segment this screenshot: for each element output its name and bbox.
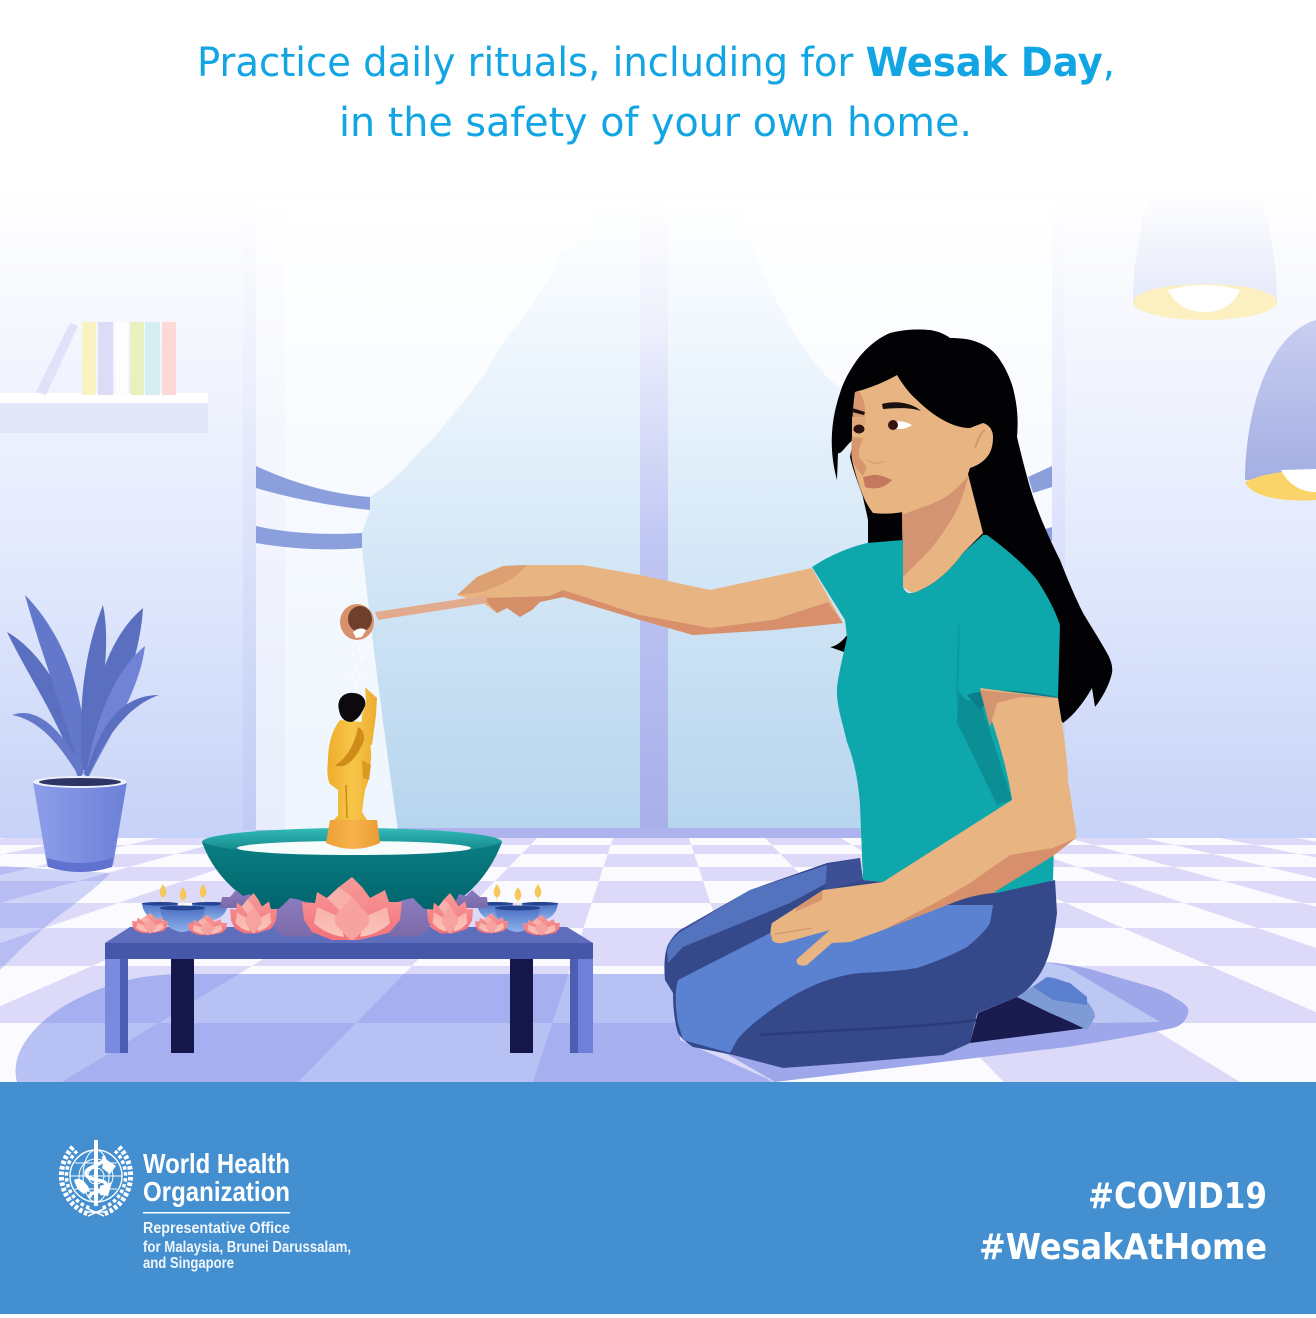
right curtain [735, 200, 1052, 830]
t-shirt [812, 535, 1060, 893]
WHO wordmark: Representative Office [143, 1220, 290, 1237]
front legs [105, 959, 120, 1053]
extended arm [457, 565, 843, 635]
pedestal [326, 820, 380, 849]
woman [457, 329, 1112, 1068]
ceiling lamp, foreground [1245, 320, 1316, 500]
title [197, 40, 1115, 146]
hashtags: #WesakAtHome [979, 1227, 1267, 1268]
WHO emblem [61, 1140, 131, 1216]
head [338, 693, 365, 722]
back legs [171, 959, 194, 1053]
title: Practice daily rituals, including for Wesak Day, [197, 40, 1115, 86]
offering bowl [202, 828, 502, 912]
potted plant [7, 595, 159, 872]
trousers [664, 858, 1057, 1068]
staff [94, 1140, 98, 1206]
baby Buddha statue [327, 687, 377, 820]
water drops [350, 638, 364, 688]
pot shadow [0, 866, 110, 970]
ladle [340, 595, 487, 640]
WHO wordmark: and Singapore [143, 1255, 234, 1272]
title: in the safety of your own home. [339, 100, 972, 146]
bookshelf with books [0, 322, 208, 433]
body [327, 720, 371, 820]
window mullion [640, 200, 668, 830]
lotus flowers [132, 877, 560, 940]
lips [863, 475, 892, 488]
globe [70, 1150, 122, 1202]
leaves [7, 595, 159, 778]
WHO wordmark [143, 1148, 351, 1272]
illustration: room background [0, 190, 1316, 840]
neck [902, 474, 983, 593]
floor tiles [0, 838, 1316, 1082]
hair tip under arm [830, 634, 848, 652]
hair [832, 329, 1112, 723]
eyes and brows [882, 402, 921, 411]
snake [86, 1156, 106, 1198]
hashtags [979, 1176, 1267, 1268]
milk [237, 841, 471, 855]
WHO wordmark: Organization [143, 1176, 290, 1207]
wreath [61, 1147, 88, 1214]
woman floor shadow [720, 962, 1188, 1082]
footer band [0, 1082, 1316, 1314]
table [105, 927, 593, 1053]
hashtags: #COVID19 [1088, 1176, 1267, 1217]
purple back flowers [220, 890, 256, 908]
candles [142, 884, 558, 932]
face [851, 375, 993, 514]
sash [335, 727, 364, 766]
WHO wordmark: for Malaysia, Brunei Darussalam, [143, 1239, 351, 1256]
ceiling lamp, faded [1133, 195, 1277, 320]
pot [33, 782, 127, 871]
lower arm and hand [770, 688, 1076, 966]
rug shadow [16, 974, 775, 1082]
raised arm [360, 687, 377, 745]
window glass [256, 200, 1052, 830]
WHO wordmark: World Health [143, 1148, 290, 1179]
left curtain [256, 200, 600, 830]
feet [970, 997, 1087, 1043]
